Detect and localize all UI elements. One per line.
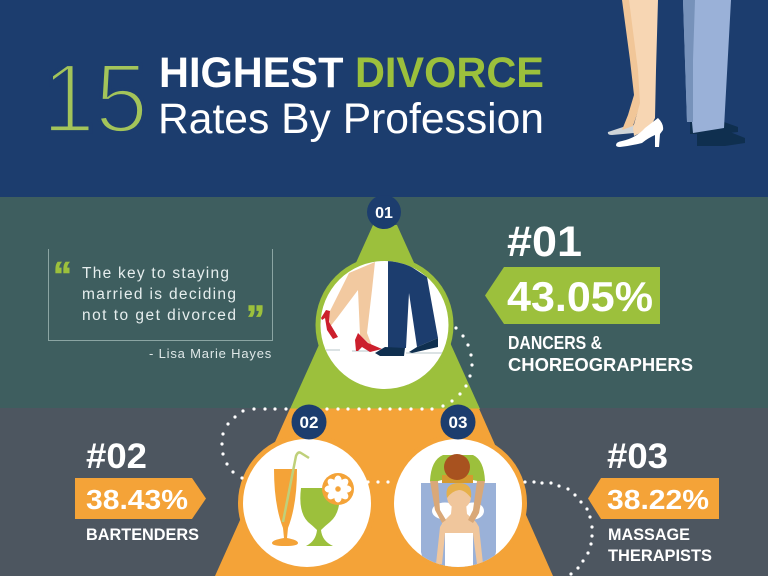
rank 02: #02: [86, 437, 147, 476]
title: [42, 43, 544, 153]
tall glass: [272, 469, 298, 546]
ring 3: [389, 434, 527, 572]
rank 03: #03: [607, 437, 668, 476]
title line 2: Rates By Profession: [158, 95, 544, 143]
rank 01: #01: [507, 218, 582, 266]
dotted connector: [220, 326, 594, 576]
value 03: 38.22%: [607, 484, 709, 515]
green glass: [300, 488, 340, 546]
quote marks: “: [53, 255, 72, 297]
ribbon 02: [75, 478, 206, 519]
quote frame: [48, 249, 272, 340]
ribbon 01: [485, 267, 660, 324]
quote text: The key to staying: [82, 265, 230, 282]
front leg: [629, 0, 658, 136]
label 01: CHOREOGRAPHERS: [508, 354, 693, 375]
badge 01: [367, 195, 401, 229]
title number 15: 15: [42, 43, 148, 153]
icon: drinks: [243, 439, 371, 567]
badge 03: [440, 404, 476, 440]
ring 2: [238, 434, 376, 572]
callout 03: [588, 437, 719, 565]
ribbon 03: [588, 478, 719, 519]
callout 01: [485, 218, 693, 375]
quote text: not to get divorced: [82, 307, 237, 324]
quote text: married is deciding: [82, 286, 237, 303]
callout 02: [75, 437, 206, 544]
straw: [283, 452, 309, 522]
icon: dancers: [320, 260, 448, 389]
client: [436, 503, 483, 564]
therapist: [442, 475, 473, 483]
label 01: DANCERS &: [508, 332, 602, 353]
badge 03: 03: [449, 413, 467, 432]
panel: pyramid: [215, 225, 553, 576]
ring 1: [316, 256, 454, 394]
label 02: BARTENDERS: [86, 525, 199, 544]
quote: [48, 249, 272, 361]
man shoes: [690, 122, 738, 134]
value 02: 38.43%: [86, 484, 188, 515]
back shoe: [608, 124, 640, 135]
quote author: - Lisa Marie Hayes: [149, 346, 272, 361]
label 03: MASSAGE: [608, 525, 690, 544]
badge 02: [292, 404, 326, 440]
trousers: [683, 0, 731, 133]
value 01: 43.05%: [507, 273, 653, 320]
title line 1: HIGHEST DIVORCE: [159, 49, 544, 97]
green triangle top: [290, 225, 480, 409]
orange triangle bottom: [215, 408, 553, 576]
orange slice: [322, 473, 354, 505]
back leg: [622, 0, 642, 130]
icon: massage: [394, 439, 522, 576]
front shoe: [616, 118, 663, 147]
quote: ”: [246, 299, 265, 341]
badge 01: 01: [375, 205, 393, 222]
label 03: THERAPISTS: [608, 546, 712, 565]
illustration: couple legs: [608, 0, 745, 147]
badge 02: 02: [300, 413, 318, 432]
